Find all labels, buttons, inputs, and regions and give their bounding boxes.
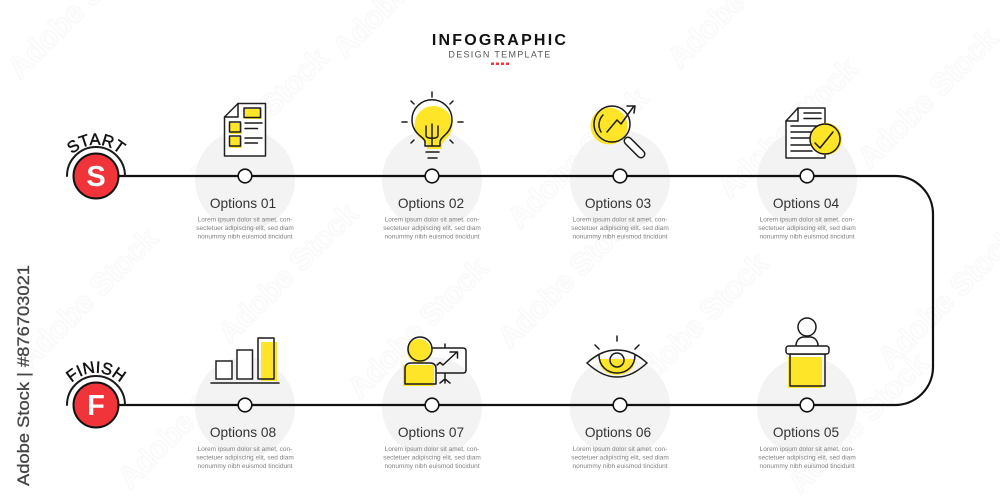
option 05 text: Lorem ipsum dolor sit amet, con- bbox=[760, 446, 854, 453]
option 03 text: Options 03 bbox=[585, 196, 651, 211]
option 02 text: sectetuer adipiscing elit, sed diam bbox=[383, 225, 481, 232]
option 02 text bbox=[383, 196, 481, 240]
option 07 text: nonummy nibh euismod tincidunt bbox=[384, 463, 480, 470]
option 02 text: Lorem ipsum dolor sit amet, con- bbox=[385, 216, 479, 224]
option 07 text: sectetuer adipiscing elit, sed diam bbox=[383, 454, 481, 462]
faint watermark pattern: Adobe Stock bbox=[182, 42, 335, 195]
option 05 text bbox=[758, 425, 856, 470]
faint watermark pattern: Adobe Stock bbox=[212, 197, 365, 350]
option 01 text bbox=[196, 196, 294, 240]
option 06 text: Lorem ipsum dolor sit amet, con- bbox=[573, 446, 667, 453]
faint watermark pattern: Adobe Stock bbox=[342, 252, 495, 405]
option 05 text: Options 05 bbox=[773, 425, 839, 440]
finish badge: F bbox=[87, 390, 105, 422]
timeline nodes bbox=[238, 169, 814, 412]
option 08 text: Options 08 bbox=[210, 425, 276, 440]
icon: magnifier with growth arrow bbox=[590, 106, 641, 154]
option 01 text: Options 01 bbox=[210, 196, 276, 211]
option 03 text: nonummy nibh euismod tincidunt bbox=[572, 234, 668, 240]
option 04 text: Options 04 bbox=[773, 196, 839, 211]
title: DESIGN TEMPLATE bbox=[448, 50, 552, 60]
icon: light bulb bbox=[402, 92, 463, 158]
option 07 text: Options 07 bbox=[398, 425, 464, 440]
faint watermark pattern: Adobe Stock bbox=[12, 222, 165, 375]
option 03 text bbox=[571, 196, 669, 240]
option 03 text: sectetuer adipiscing elit, sed diam bbox=[571, 225, 669, 232]
background circles bbox=[195, 130, 857, 457]
option 01 text: sectetuer adipiscing elit, sed diam bbox=[196, 225, 294, 232]
option 03 text: Lorem ipsum dolor sit amet, con- bbox=[573, 216, 667, 224]
icon: checklist document bbox=[224, 104, 266, 156]
option 07 text: Lorem ipsum dolor sit amet, con- bbox=[385, 446, 479, 453]
option 06 text: Options 06 bbox=[585, 425, 651, 440]
option 08 text: sectetuer adipiscing elit, sed diam bbox=[196, 454, 294, 462]
faint watermark pattern: Adobe Stock bbox=[502, 82, 655, 235]
option 06 text: nonummy nibh euismod tincidunt bbox=[572, 463, 668, 470]
option 06 text: sectetuer adipiscing elit, sed diam bbox=[571, 454, 669, 462]
option 05 text: sectetuer adipiscing elit, sed diam bbox=[758, 454, 856, 462]
title red dots bbox=[491, 62, 509, 65]
option 06 text bbox=[571, 425, 669, 470]
icon: eye bbox=[587, 336, 647, 377]
stock id side text: Adobe Stock | #876703021 bbox=[14, 265, 33, 486]
icon: approved document bbox=[786, 108, 842, 158]
option 08 text: Lorem ipsum dolor sit amet, con- bbox=[198, 446, 292, 453]
option 04 text: Lorem ipsum dolor sit amet, con- bbox=[760, 216, 854, 224]
option 02 text: nonummy nibh euismod tincidunt bbox=[384, 234, 480, 240]
option 02 text: Options 02 bbox=[398, 196, 464, 211]
timeline path bbox=[118, 176, 933, 405]
option 01 text: Lorem ipsum dolor sit amet, con- bbox=[198, 216, 292, 224]
option 08 text: nonummy nibh euismod tincidunt bbox=[197, 463, 293, 470]
option 07 text bbox=[383, 425, 481, 470]
start badge: S bbox=[86, 161, 106, 193]
faint watermark pattern: Adobe Stock bbox=[782, 347, 935, 500]
faint watermark pattern: Adobe Stock bbox=[112, 342, 265, 495]
option 05 text: nonummy nibh euismod tincidunt bbox=[759, 463, 855, 470]
option 04 text bbox=[758, 196, 856, 240]
option 08 text bbox=[196, 425, 294, 470]
option 04 text: nonummy nibh euismod tincidunt bbox=[759, 234, 855, 240]
title: INFOGRAPHIC bbox=[432, 32, 568, 49]
title bbox=[432, 32, 568, 60]
icon: presenter with chart board bbox=[403, 337, 466, 386]
start badge: START bbox=[67, 133, 127, 153]
option 01 text: nonummy nibh euismod tincidunt bbox=[197, 234, 293, 240]
option 04 text: sectetuer adipiscing elit, sed diam bbox=[758, 225, 856, 232]
icon: bar chart bbox=[211, 338, 279, 383]
icon: speaker at podium bbox=[786, 318, 829, 388]
finish badge bbox=[65, 361, 126, 428]
faint watermark pattern: Adobe Stock bbox=[622, 247, 775, 400]
faint watermark pattern: Adobe Stock bbox=[712, 52, 865, 205]
start badge bbox=[66, 133, 127, 200]
faint watermark pattern: Adobe Stock bbox=[492, 202, 645, 355]
finish badge: FINISH bbox=[65, 361, 126, 382]
